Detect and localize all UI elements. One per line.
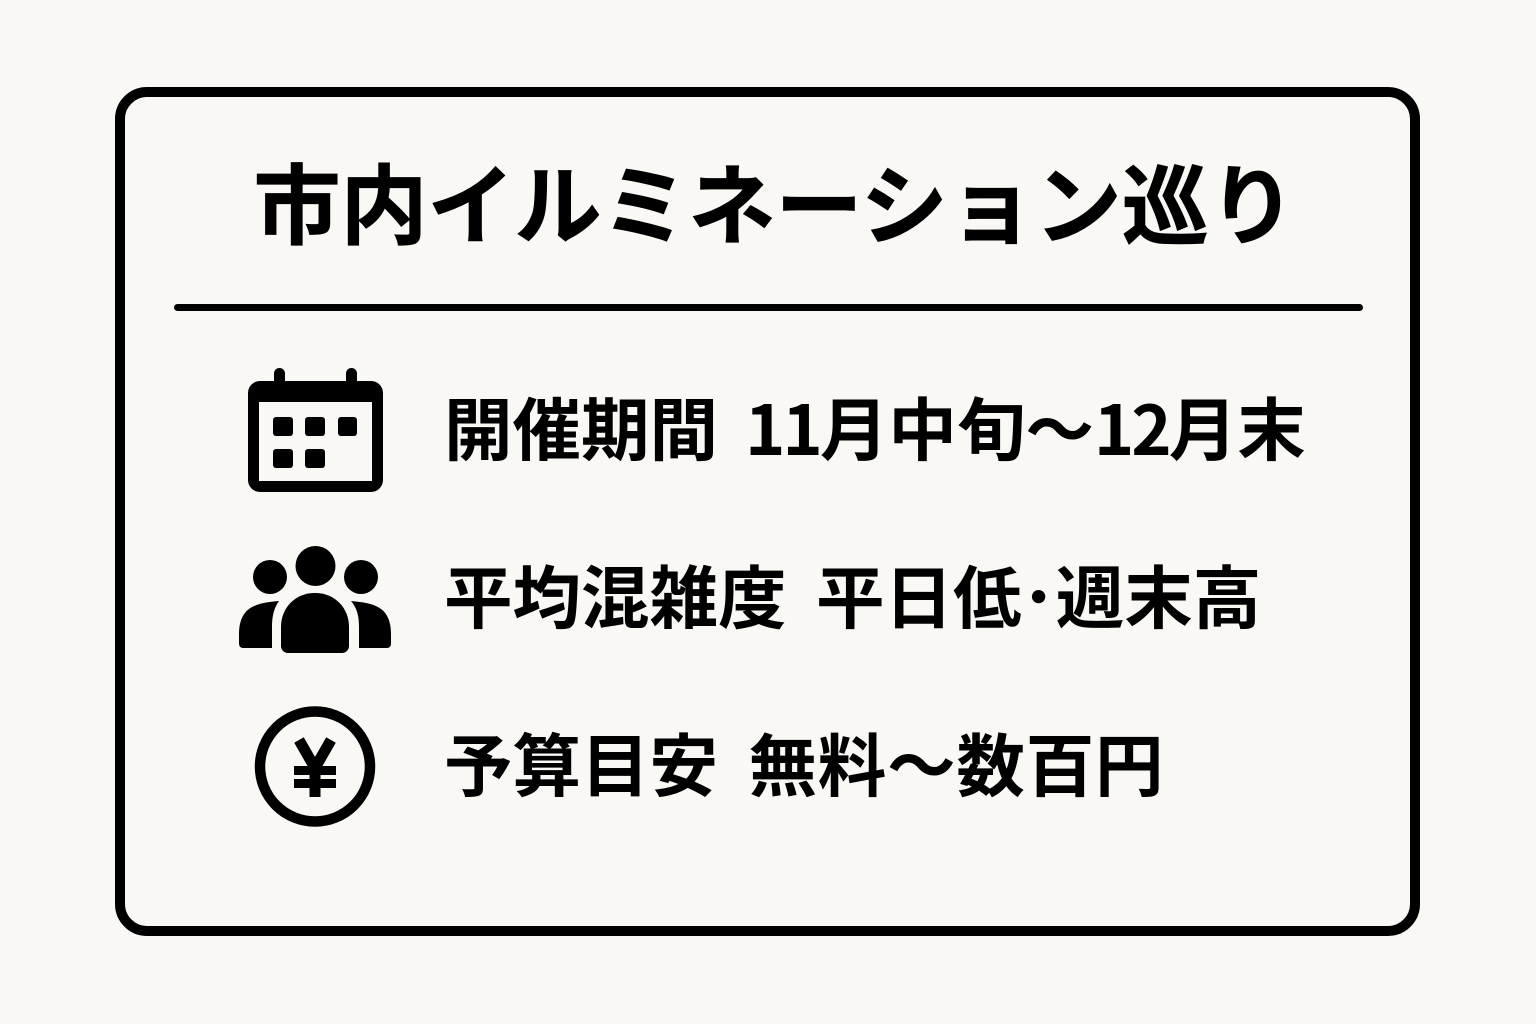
row 1 label: 開催期間 xyxy=(444,393,718,470)
title divider xyxy=(174,304,1363,311)
icon: people group xyxy=(239,546,391,653)
row 1 value: 11月中旬～12月末 xyxy=(745,376,1306,475)
row 3 label: 予算目安 xyxy=(444,729,718,806)
row 2 value: 平日低･週末高 xyxy=(816,561,1261,638)
row 3 value: 無料～数百円 xyxy=(748,729,1164,806)
panel: main card frame xyxy=(115,87,1420,936)
icon: yen coin xyxy=(254,706,376,827)
title: 市内イルミネーション巡り xyxy=(254,159,1296,256)
row 2 label: 平均混雑度 xyxy=(444,561,787,638)
icon: calendar xyxy=(248,368,383,492)
